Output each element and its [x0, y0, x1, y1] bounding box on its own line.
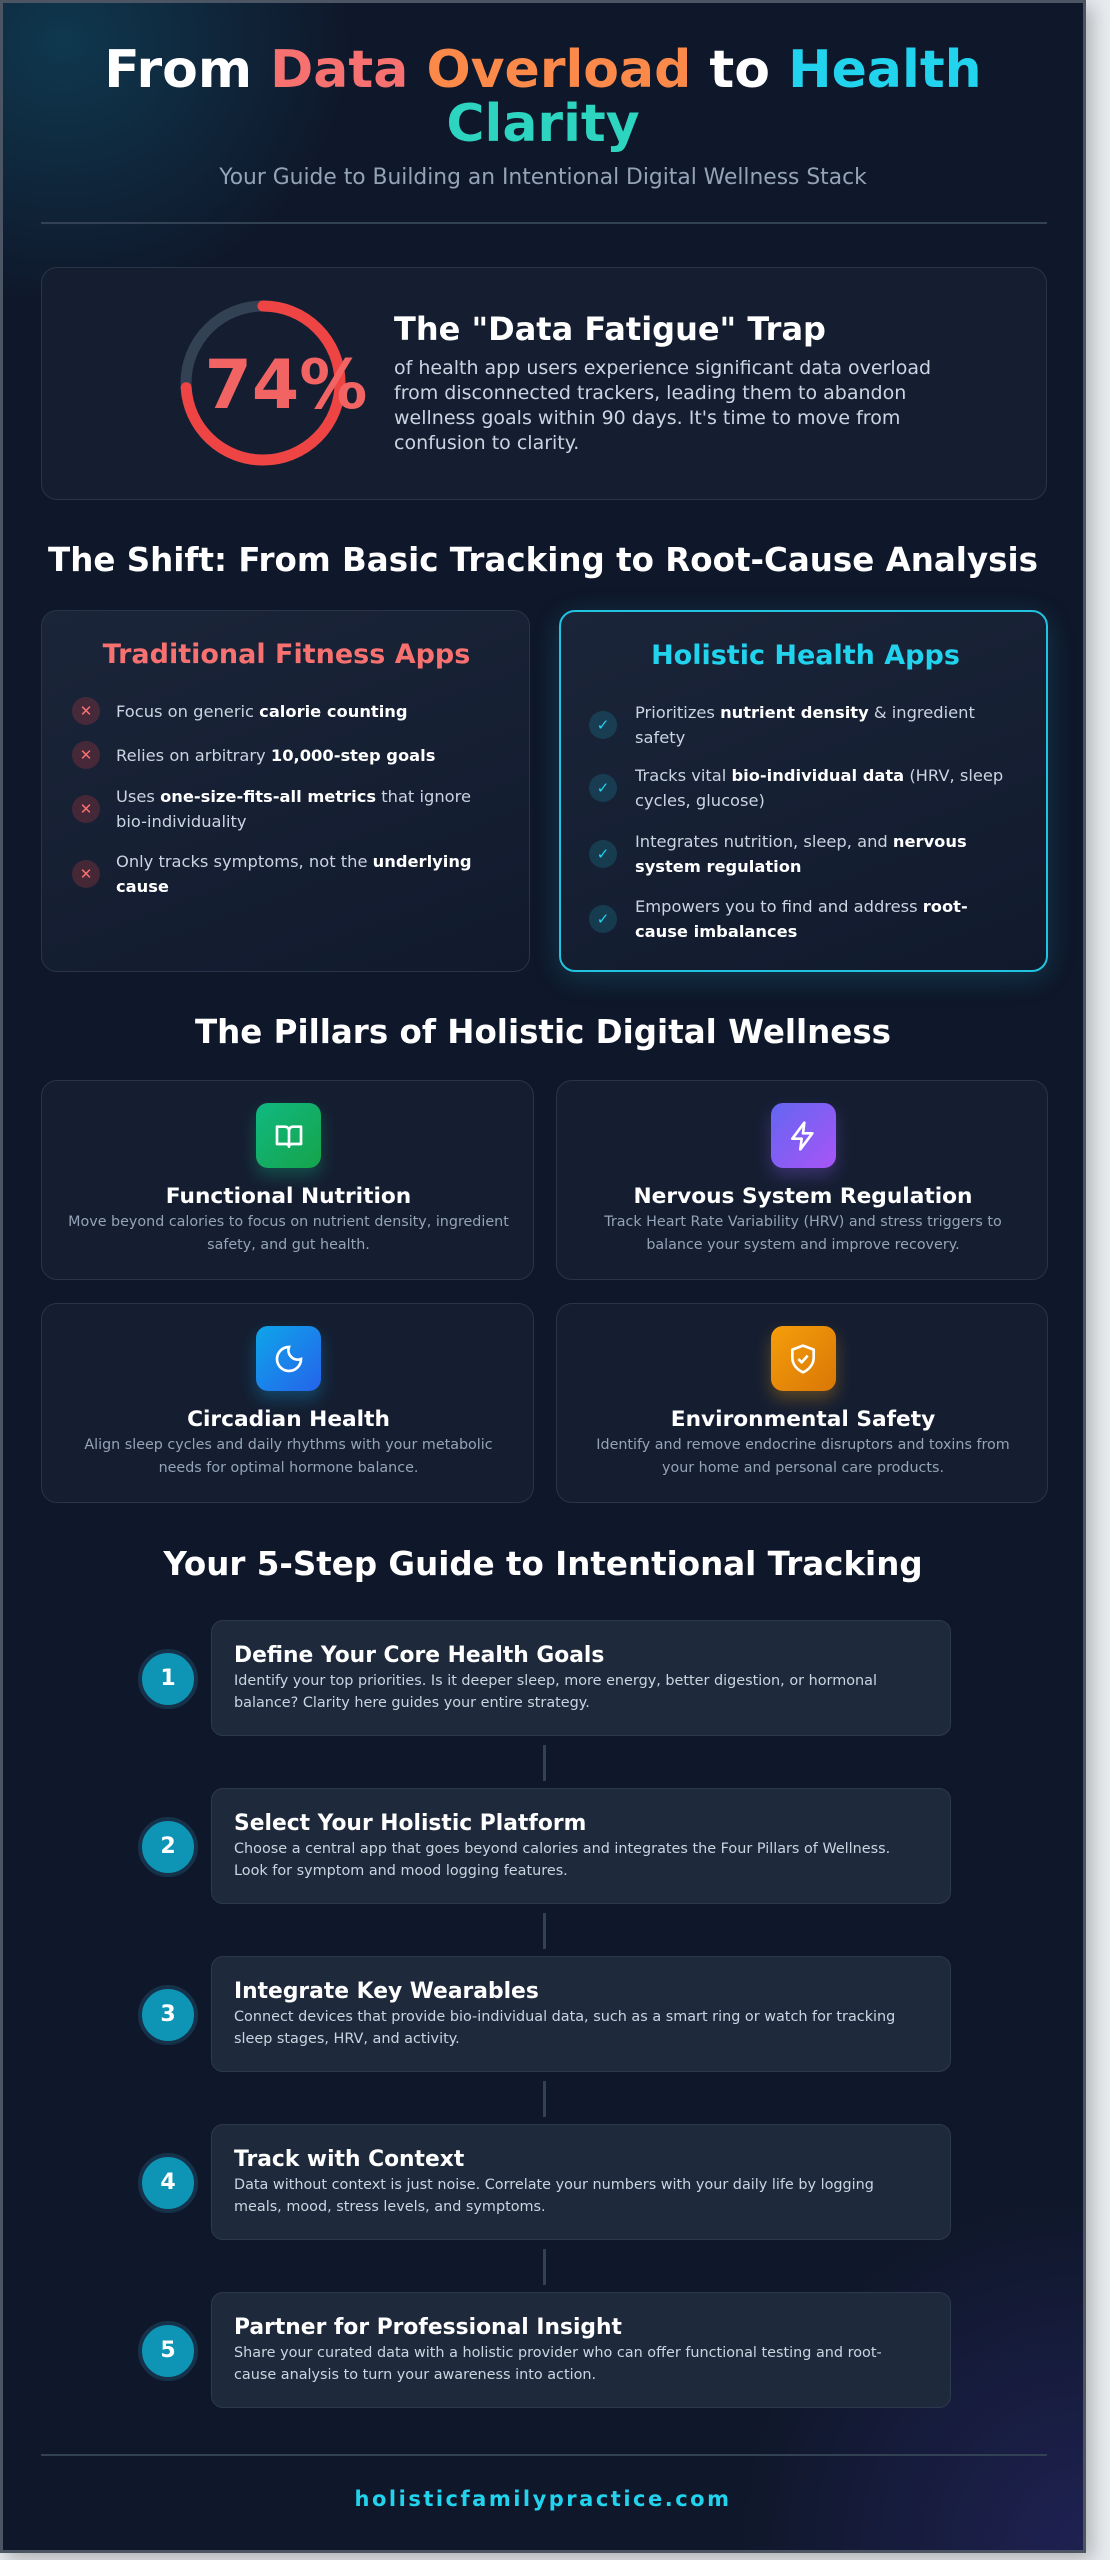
- list: holistic items: ✓: [597, 910, 609, 928]
- title: Clarity: [446, 94, 640, 154]
- icon: moon: [256, 1326, 321, 1391]
- step 5: 5: [160, 2338, 176, 2363]
- step 2: 2: [160, 1834, 176, 1859]
- pillar: functional nutrition: safety, and gut health.: [207, 1237, 370, 1253]
- donut chart: 74%: [180, 300, 367, 466]
- pillar: functional nutrition: Functional Nutrition: [166, 1184, 411, 1209]
- pillar: nervous system: Nervous System Regulation: [634, 1184, 972, 1209]
- heading: the shift: The Shift: From Basic Tracking to Root-Cause Analysis: [48, 541, 1038, 579]
- step 4: [138, 2124, 951, 2240]
- heading: 5-step guide: Your 5-Step Guide to Intentional Tracking: [163, 1545, 923, 1583]
- step 5: cause analysis to turn your awareness into action.: [234, 2367, 596, 2383]
- step 2: Select Your Holistic Platform: [234, 1811, 586, 1836]
- pillar: environmental: Environmental Safety: [671, 1407, 935, 1432]
- pillar: circadian: [41, 1303, 534, 1503]
- list: traditional items: ✕: [80, 702, 92, 720]
- stat text: of health app users experience significant data overload from disconnected trackers, leading them to abandon wellness goals within 90 days. It's time to move from confusion to clarity.: [394, 357, 931, 454]
- pillar: environmental: [556, 1303, 1048, 1503]
- list: traditional items: Uses one-size-fits-all metrics that ignore bio-individuality: [116, 787, 471, 831]
- heading: holistic: Holistic Health Apps: [651, 640, 960, 671]
- list: holistic items: ✓: [597, 845, 609, 863]
- list: holistic items: Empowers you to find and address root-cause imbalances: [635, 897, 968, 941]
- list: traditional items: Focus on generic calorie counting: [116, 702, 408, 721]
- step 4: 4: [160, 2170, 176, 2195]
- step 4: Data without context is just noise. Correlate your numbers with your daily life by logging: [234, 2177, 874, 2193]
- list: holistic items: Integrates nutrition, sleep, and nervous system regulation: [635, 832, 967, 876]
- title: [104, 40, 982, 154]
- step 1: Identify your top priorities. Is it deeper sleep, more energy, better digestion, or hormonal: [234, 1673, 877, 1689]
- step 5: Share your curated data with a holistic provider who can offer functional testing and root-: [234, 2345, 882, 2361]
- list: traditional items: Relies on arbitrary 10,000-step goals: [116, 746, 435, 765]
- pillar: environmental: Identify and remove endocrine disruptors and toxins from: [596, 1437, 1010, 1453]
- donut chart: 74%: 74%: [205, 346, 367, 425]
- title: From Data Overload to Health: [104, 40, 982, 100]
- step 1: 1: [160, 1666, 176, 1691]
- list: holistic items: [589, 703, 1003, 941]
- list: holistic items: ✓: [597, 716, 609, 734]
- pillar: circadian: needs for optimal hormone balance.: [159, 1460, 418, 1476]
- subtitle: Your Guide to Building an Intentional Digital Wellness Stack: [219, 165, 867, 190]
- list: traditional items: ✕: [80, 800, 92, 818]
- list: traditional items: ✕: [80, 865, 92, 883]
- step 2: [138, 1788, 951, 1904]
- step 4: Track with Context: [234, 2147, 464, 2172]
- pillar: circadian: Align sleep cycles and daily rhythms with your metabolic: [84, 1437, 493, 1453]
- pillar: nervous system: balance your system and improve recovery.: [646, 1237, 960, 1253]
- step 3: Connect devices that provide bio-individual data, such as a smart ring or watch for tracking: [234, 2009, 895, 2025]
- list: holistic items: ✓: [597, 779, 609, 797]
- pillar: functional nutrition: Move beyond calories to focus on nutrient density, ingredient: [68, 1214, 509, 1230]
- list: holistic items: Tracks vital bio-individual data (HRV, sleep cycles, glucose): [635, 766, 1003, 810]
- pillar: functional nutrition: [41, 1080, 534, 1280]
- icon: shield: [770, 1326, 836, 1391]
- step 3: sleep stages, HRV, and activity.: [234, 2031, 460, 2047]
- pillar: nervous system: [556, 1080, 1048, 1280]
- heading: pillars: The Pillars of Holistic Digital Wellness: [195, 1013, 891, 1051]
- stat heading: The "Data Fatigue" Trap: [394, 310, 826, 348]
- list: holistic items: Prioritizes nutrient density & ingredient safety: [635, 703, 975, 747]
- pillar: environmental: your home and personal care products.: [662, 1460, 944, 1476]
- pillar: circadian: Circadian Health: [187, 1407, 390, 1432]
- list: traditional items: ✕: [80, 746, 92, 764]
- step 1: [138, 1620, 951, 1736]
- step 2: Look for symptom and mood logging features.: [234, 1863, 568, 1879]
- step 1: Define Your Core Health Goals: [234, 1643, 604, 1668]
- panel: data fatigue stat: [41, 267, 1047, 500]
- step 3: [138, 1956, 951, 2072]
- step 1: balance? Clarity here guides your entire strategy.: [234, 1695, 590, 1711]
- panel: traditional fitness apps: [41, 610, 530, 972]
- pillar: nervous system: Track Heart Rate Variability (HRV) and stress triggers to: [604, 1214, 1002, 1230]
- icon: book: [256, 1103, 321, 1168]
- step 5: [138, 2292, 951, 2408]
- step 5: Partner for Professional Insight: [234, 2315, 622, 2340]
- step 2: Choose a central app that goes beyond calories and integrates the Four Pillars of Wellness.: [234, 1841, 890, 1857]
- panel: holistic health apps: [559, 610, 1048, 972]
- step 3: Integrate Key Wearables: [234, 1979, 539, 2004]
- footer: website: holisticfamilypractice.com: [355, 2487, 731, 2511]
- list: traditional items: Only tracks symptoms, not the underlying cause: [116, 852, 472, 896]
- list: traditional items: [72, 697, 472, 896]
- icon: lightning: [770, 1103, 836, 1168]
- heading: traditional: Traditional Fitness Apps: [103, 639, 470, 670]
- step 3: 3: [160, 2002, 176, 2027]
- step 4: meals, mood, stress levels, and symptoms.: [234, 2199, 546, 2215]
